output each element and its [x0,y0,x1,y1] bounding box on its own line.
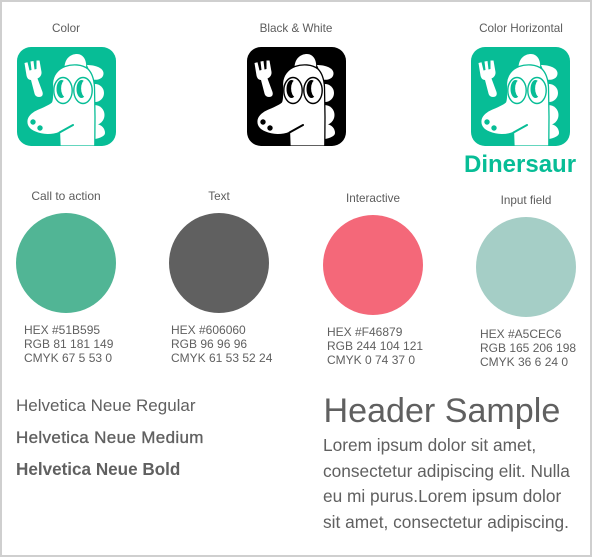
body sample: Lorem ipsum dolor sit amet, [323,435,536,455]
type sample: bold: Helvetica Neue Bold [16,460,180,479]
label: Interactive: Interactive [346,192,400,205]
spec: input field: CMYK 36 6 24 0 [480,355,568,369]
type sample: medium: Helvetica Neue Medium [16,428,204,447]
label: Text: Text [208,190,230,203]
spec: call to action: HEX #51B595 [24,323,100,337]
type sample: regular: Helvetica Neue Regular [16,396,196,415]
body sample [323,435,570,532]
swatch: input field [476,217,576,317]
swatch: text [169,213,269,313]
spec: interactive: RGB 244 104 121 [327,339,423,353]
spec: input field: RGB 165 206 198 [480,341,576,355]
spec: input field [480,327,576,369]
spec: text: RGB 96 96 96 [171,337,247,351]
wordmark: Dinersaur: Dinersaur [464,151,576,178]
label: Input field: Input field [501,194,551,207]
swatch: call to action [16,213,116,313]
swatch: interactive [323,215,423,315]
label: Color: Color [52,22,80,35]
spec: input field: HEX #A5CEC6 [480,327,561,341]
header sample: Header Sample [324,392,560,430]
spec: call to action: CMYK 67 5 53 0 [24,351,112,365]
label: Color Horizontal: Color Horizontal [479,22,563,35]
label: Call to action: Call to action [31,189,101,203]
body sample: sit amet, consectetur adipiscing. [323,512,569,532]
spec: text: HEX #606060 [171,323,246,337]
icon: black and white logo [247,47,346,146]
body sample: eu mi purus.Lorem ipsum dolor [323,486,561,506]
spec: text: CMYK 61 53 52 24 [171,351,272,365]
spec: text [171,323,272,365]
icon: color horizontal logo [471,47,570,146]
spec: call to action [24,323,113,365]
spec: interactive: CMYK 0 74 37 0 [327,353,415,367]
spec: interactive: HEX #F46879 [327,325,402,339]
spec: call to action: RGB 81 181 149 [24,337,113,351]
label: Black & White: Black & White [260,22,332,35]
body sample: consectetur adipiscing elit. Nulla [323,460,570,480]
icon: color logo [17,47,116,146]
spec: interactive [327,325,423,367]
